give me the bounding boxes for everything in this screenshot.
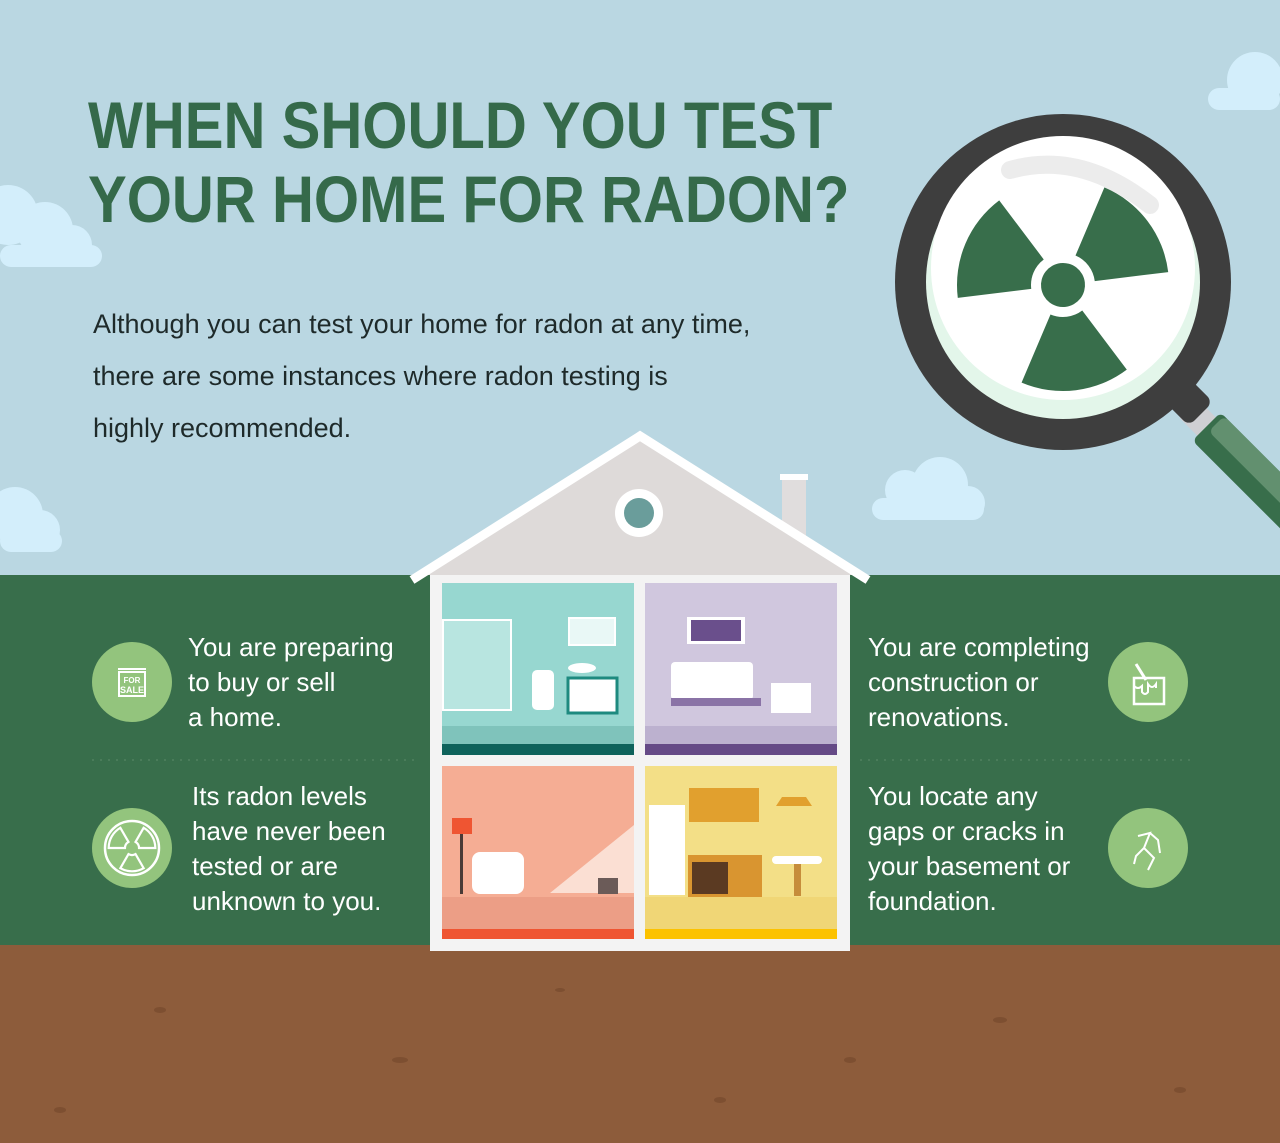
dividers <box>92 759 420 761</box>
body <box>430 575 850 951</box>
icon: paint bucket <box>1108 642 1188 722</box>
icon: cracks <box>1108 808 1188 888</box>
cloud left <box>0 185 102 267</box>
text: Its radon levels <box>192 781 367 811</box>
cloud top right <box>1208 52 1280 110</box>
item: cracks <box>868 781 1188 916</box>
title: WHEN SHOULD YOU TEST <box>88 88 832 162</box>
text: your basement or <box>868 851 1070 881</box>
intro text: there are some instances where radon testing is <box>93 361 668 391</box>
green band <box>0 575 1280 947</box>
handle <box>1175 395 1280 540</box>
text: You are preparing <box>188 632 394 662</box>
text <box>188 632 394 732</box>
icon: for sale sign: SALE <box>120 685 144 695</box>
text: renovations. <box>868 702 1010 732</box>
cloud left bottom <box>0 487 62 552</box>
text: construction or <box>868 667 1039 697</box>
title <box>88 88 849 236</box>
title: YOUR HOME FOR RADON? <box>88 162 849 236</box>
cloud middle right <box>872 457 985 520</box>
icon: radiation <box>92 808 172 888</box>
text <box>192 781 386 916</box>
text <box>868 781 1070 916</box>
item: construction <box>868 632 1188 732</box>
intro text <box>93 309 750 443</box>
house <box>410 430 870 951</box>
intro text: Although you can test your home for radon at any time, <box>93 309 750 339</box>
bedroom <box>645 583 837 755</box>
roof <box>782 476 806 536</box>
kitchen <box>645 766 837 939</box>
icon: for sale sign <box>92 642 172 722</box>
icon: for sale sign: FOR <box>124 676 141 685</box>
text: tested or are <box>192 851 338 881</box>
text: to buy or sell <box>188 667 335 697</box>
text: have never been <box>192 816 386 846</box>
item: buy or sell <box>92 632 394 732</box>
living room <box>442 766 634 939</box>
text: unknown to you. <box>192 886 381 916</box>
item: never tested <box>92 781 386 916</box>
text: a home. <box>188 702 282 732</box>
radiation trefoil <box>934 172 1193 405</box>
dirt <box>0 945 1280 1143</box>
intro text: highly recommended. <box>93 413 351 443</box>
text: foundation. <box>868 886 997 916</box>
bathroom <box>442 583 634 755</box>
text: gaps or cracks in <box>868 816 1065 846</box>
text <box>868 632 1090 732</box>
text: You are completing <box>868 632 1090 662</box>
magnifier <box>895 114 1280 528</box>
text: You locate any <box>868 781 1038 811</box>
